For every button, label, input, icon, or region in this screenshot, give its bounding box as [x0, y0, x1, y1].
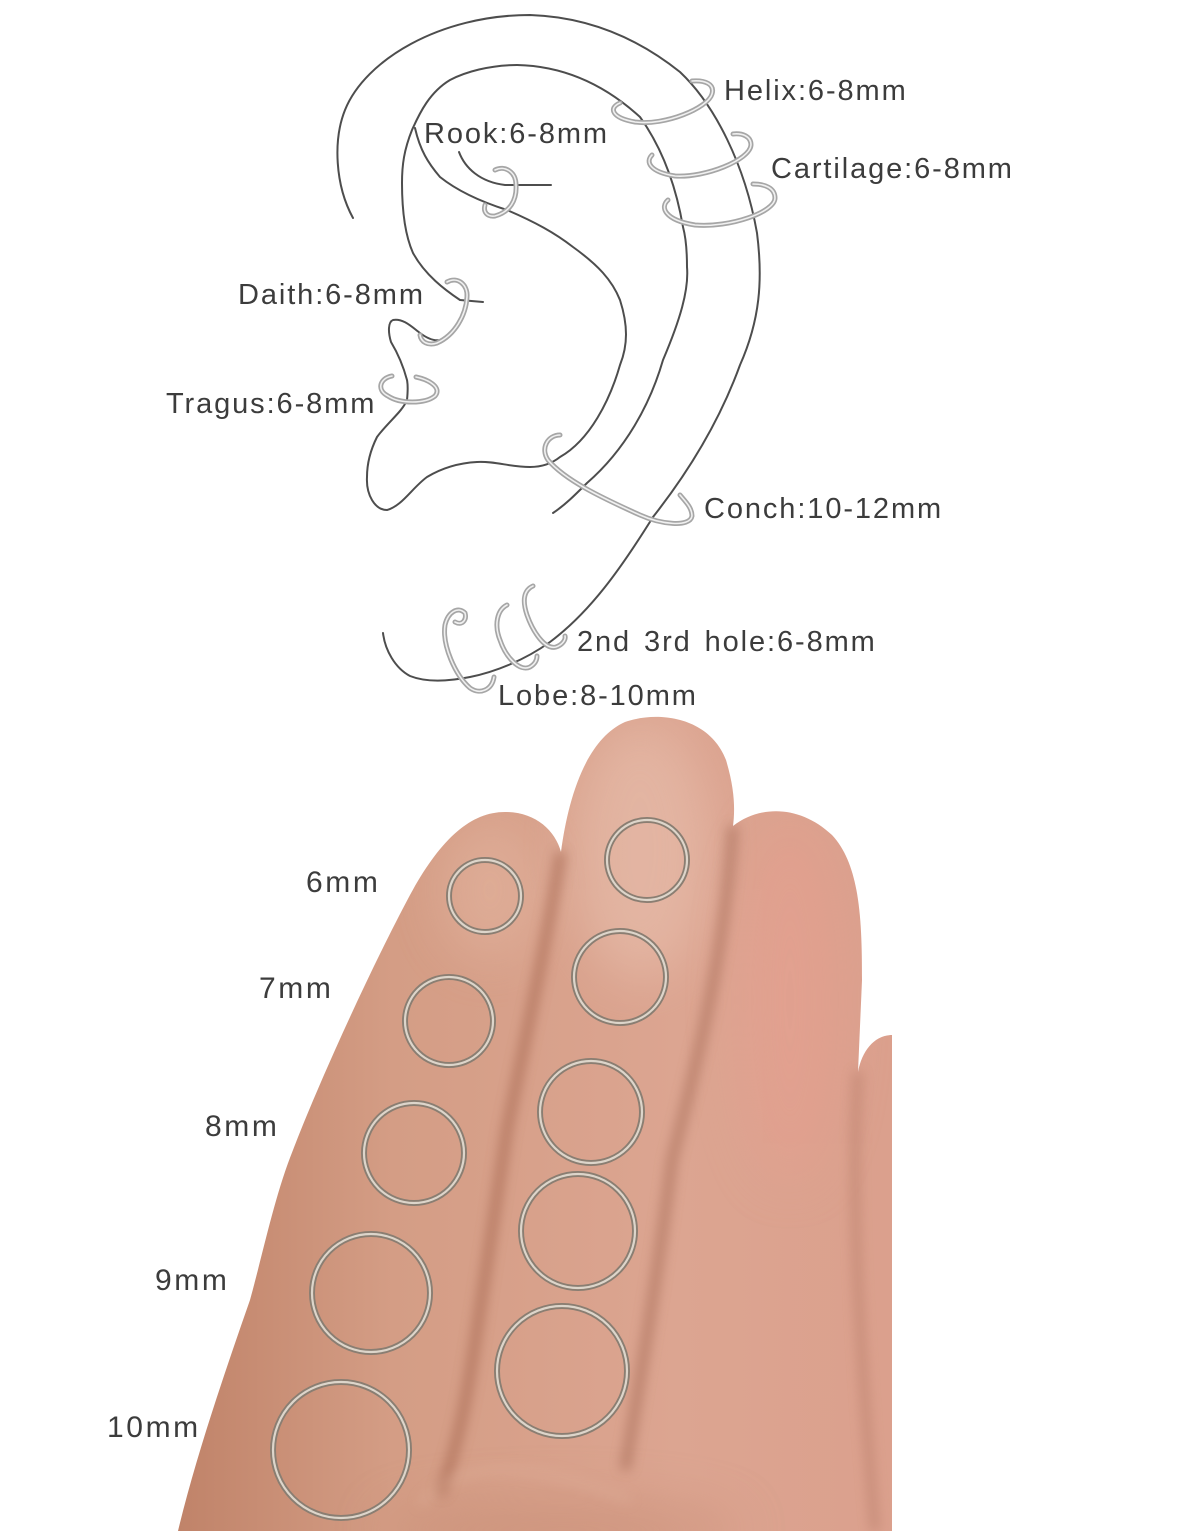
third hole ring [524, 586, 565, 647]
ring: 10mm [273, 1382, 409, 1518]
label: helix: Helix:6-8mm [724, 75, 908, 107]
label: tragus: Tragus:6-8mm [166, 388, 376, 420]
label: cartilage: Cartilage:6-8mm [771, 153, 1014, 185]
conch ring [545, 435, 692, 523]
inner helix outline [402, 65, 687, 513]
photo: hand with ring sizes [178, 717, 892, 1531]
label: 8mm: 8mm [205, 1110, 279, 1143]
ring: 8mm [364, 1103, 464, 1203]
label: 9mm: 9mm [155, 1264, 229, 1297]
ring: 7mm [405, 977, 493, 1065]
hand silhouette [178, 717, 892, 1531]
rook ring [484, 168, 516, 216]
label: 2nd 3rd hole: 2nd 3rd hole:6-8mm [577, 626, 877, 658]
label: daith: Daith:6-8mm [238, 279, 425, 311]
ring: 7mm [574, 931, 666, 1023]
size labels [107, 866, 380, 1444]
ring: 10mm [497, 1306, 627, 1436]
piercing labels [166, 75, 1014, 712]
label: lobe: Lobe:8-10mm [498, 680, 698, 712]
cartilage ring 2 [664, 184, 775, 225]
label: 6mm: 6mm [306, 866, 380, 899]
ear diagram [166, 15, 1014, 712]
helix ring [613, 81, 713, 123]
tragus ring [381, 376, 437, 402]
ring: 9mm [521, 1174, 635, 1288]
ring: 6mm [607, 820, 687, 900]
cartilage ring 1 [649, 134, 751, 176]
antihelix and tragus outline [367, 128, 626, 510]
daith ring [420, 280, 467, 344]
rook fold line [459, 152, 551, 185]
lobe ring [445, 610, 494, 691]
label: 7mm: 7mm [259, 972, 333, 1005]
second hole ring [497, 605, 537, 668]
finger shading [380, 720, 875, 1531]
ring: 9mm [312, 1234, 430, 1352]
outer helix outline [337, 15, 760, 681]
label: conch: Conch:10-12mm [704, 493, 943, 525]
rings on index finger [273, 860, 521, 1518]
ear piercing rings [381, 81, 775, 691]
label: 10mm: 10mm [107, 1411, 201, 1444]
rings on middle finger [497, 820, 687, 1436]
ring: 6mm [449, 860, 521, 932]
ring: 8mm [540, 1061, 642, 1163]
label: rook: Rook:6-8mm [424, 118, 609, 150]
